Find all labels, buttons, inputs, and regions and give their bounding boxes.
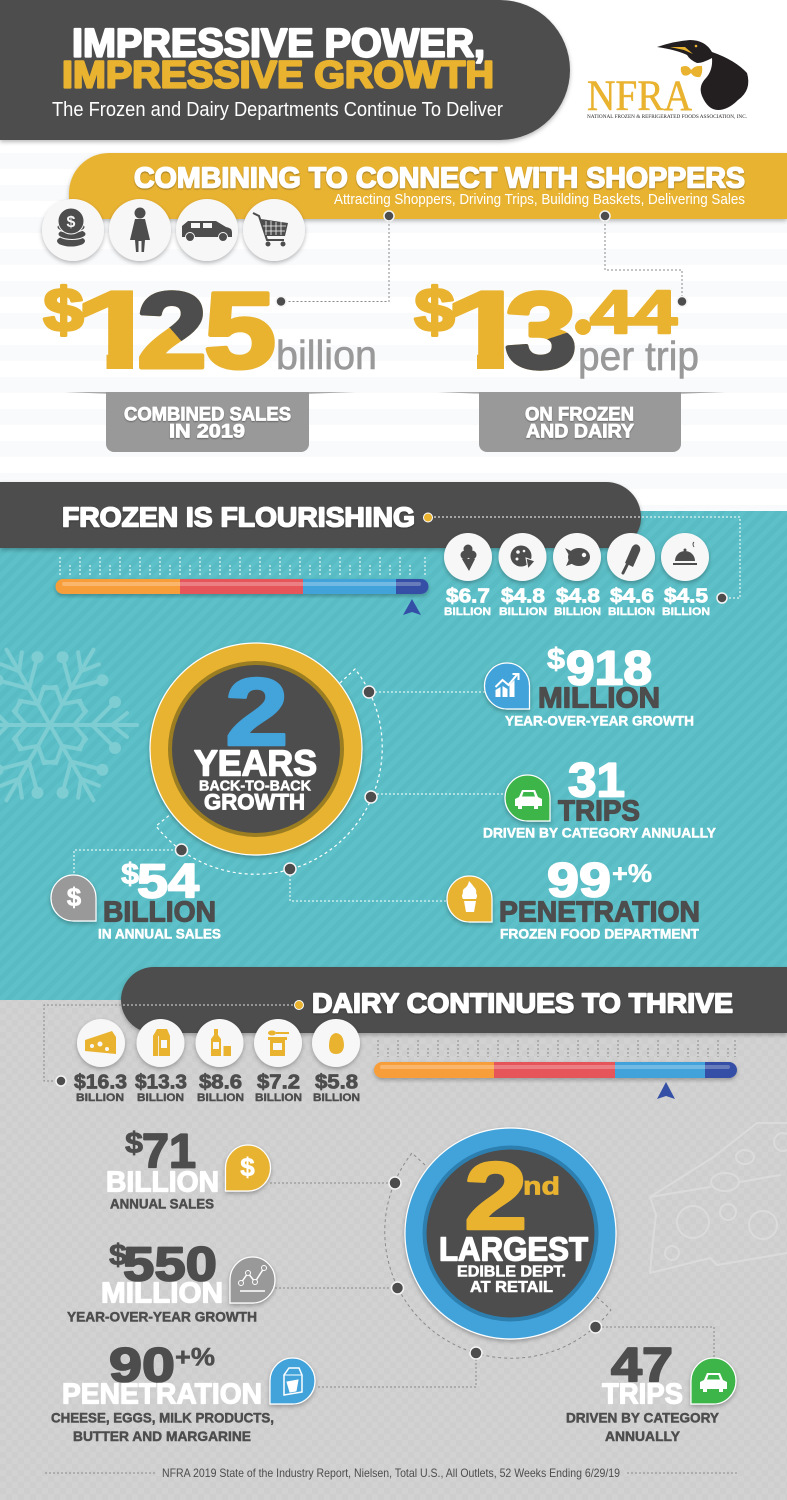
amount 3: $8.6 [199,1072,242,1094]
icon: yogurt [254,1019,302,1067]
stat: 550 million [67,1238,275,1325]
big numeral 2: 2 [225,659,288,766]
amount 5: $4.5 [664,586,708,608]
caption: YEAR-OVER-YEAR GROWTH [505,713,694,729]
LARGEST: LARGEST [439,1230,588,1268]
icon: milk bottle and glass [196,1019,244,1067]
unit 5: BILLION [313,1092,360,1104]
label box: on frozen and dairy: AND DAIRY [526,422,634,442]
number 3: 3 [505,270,577,390]
stat: 71 billion [106,1126,270,1212]
panel: frozen section [0,482,740,942]
amount 3: $4.8 [556,586,600,608]
connector: heading to amounts [424,513,740,603]
amount 4: $7.2 [257,1072,300,1094]
stat: 13.44 per trip [414,284,698,379]
icon: growth chart pin [484,663,530,709]
icon: coins: $ [67,214,76,231]
caption line 2: BUTTER AND MARGARINE [73,1428,251,1444]
BILLION: BILLION [103,896,216,928]
section heading: FROZEN IS FLOURISHING [62,502,415,532]
logo wordmark: NFRA [587,73,692,120]
unit 2: BILLION [499,606,547,618]
number 1: 1 [444,268,531,392]
caption line 1: DRIVEN BY CATEGORY [566,1410,720,1426]
number 2: 2 [137,270,207,390]
stat: 47 trips [566,1340,736,1444]
stat: 31 trips [483,754,717,841]
amount 4: $4.6 [610,586,654,608]
number 5: 5 [204,270,276,390]
icon: dollar pin: $ [67,882,82,912]
icon: fish [553,533,601,581]
label box: combined sales [65,392,355,452]
dollar sign: $ [109,1239,127,1272]
stat: 918 million [484,642,694,729]
number: 918 [566,642,652,696]
icon: pizza [498,533,546,581]
dollar sign: $ [44,276,84,344]
hero circle: 2 years growth [150,643,362,855]
progress bar [374,1062,737,1078]
AT RETAIL: AT RETAIL [470,1279,553,1296]
icon: cheese [77,1019,125,1067]
amount 2: $13.3 [135,1072,187,1094]
number 1: 1 [74,268,161,392]
icon: dollar pin [51,875,96,921]
header panel [0,0,570,140]
tick marks [378,1040,735,1057]
decimal point [575,319,591,335]
decimals: 44 [590,278,677,346]
unit 4: BILLION [255,1092,302,1104]
unit 4: BILLION [608,606,655,618]
EDIBLE DEPT.: EDIBLE DEPT. [457,1264,566,1280]
header banner shape [0,0,570,140]
icon: dollar pin: $ [240,1152,255,1182]
number: 31 [568,754,625,808]
unit 3: BILLION [554,606,601,618]
TRIPS: TRIPS [558,796,640,828]
icon: ice cream [444,533,492,581]
label box: on frozen and dairy: ON FROZEN [525,404,634,426]
dollar sign: $ [414,276,455,344]
number 2 dark overlay: 2 [137,270,207,390]
hero circle: 2nd largest [405,1128,616,1339]
TRIPS: TRIPS [602,1378,683,1410]
section heading: COMBINING TO CONNECT WITH SHOPPERS [134,162,745,194]
dollar sign: $ [125,1127,143,1160]
dollar sign: $ [547,643,565,676]
unit 3: BILLION [197,1092,244,1104]
panel: combining to connect with shoppers [42,153,787,452]
caption: FROZEN FOOD DEPARTMENT [500,926,699,942]
amount 5: $5.8 [315,1072,358,1094]
caption line 1: CHEESE, EGGS, MILK PRODUCTS, [51,1410,274,1426]
icon: car pin [691,1358,736,1404]
number 3 dark overlay: 3 [505,270,577,390]
logo tagline: NATIONAL FROZEN & REFRIGERATED FOODS ASSOCIATION, INC. [587,114,748,120]
icon: penguin eye [695,45,697,47]
gray dairy section background [0,1000,787,1500]
frozen banner [0,482,641,548]
connector: sales [276,211,394,306]
amount 2: $4.8 [501,586,545,608]
caption line 2: ANNUALLY [605,1428,681,1444]
NFRA logo [587,40,748,120]
BILLION: BILLION [106,1166,219,1198]
unit: billion: billion [276,332,377,378]
unit 5: BILLION [662,606,710,618]
icon: car pin [505,775,550,821]
icon: soft serve pin [447,876,492,922]
number: 71 [142,1126,196,1178]
panel: dairy section [44,967,787,1444]
PENETRATION: PENETRATION [62,1378,262,1410]
icon: coins [42,199,104,261]
amount 1: $6.7 [446,586,490,608]
unit: per trip: per trip [578,333,699,379]
YEARS: YEARS [194,742,317,784]
section subheading: Attracting Shoppers, Driving Trips, Building Baskets, Delivering Sales [334,192,745,208]
unit 1: BILLION [76,1092,124,1104]
stat: 125 billion [42,284,375,370]
marker arrow [403,599,421,615]
icon: car [176,199,238,261]
connector: per trip [600,211,687,306]
BACK-TO-BACK: BACK-TO-BACK [199,778,311,794]
footer source note: NFRA 2019 State of the Industry Report, Nielsen, Total U.S., All Outlets, 52 Weeks Ending 6/29/19 [162,1466,620,1480]
connector: heading to amounts [44,1000,304,1086]
caption: YEAR-OVER-YEAR GROWTH [67,1309,257,1325]
progress bar [56,579,429,594]
title line 2: IMPRESSIVE GROWTH [62,54,494,96]
caption: DRIVEN BY CATEGORY ANNUALLY [483,825,717,841]
stat: 90+% penetration [51,1340,315,1444]
icon: penguin [657,40,748,110]
GROWTH: GROWTH [204,790,305,814]
stat: 54 billion [51,856,221,942]
icon: milk carton pin [270,1358,315,1404]
connector arc: frozen [74,669,505,901]
label box: combined sales: IN 2019 [169,422,245,442]
icon: line chart pin [230,1257,275,1303]
cheese watermark [650,1123,787,1273]
snowflake watermark [0,636,137,814]
teal frozen section background [0,511,787,1000]
section heading: DAIRY CONTINUES TO THRIVE [312,988,733,1018]
number: 54 [137,856,199,908]
MILLION: MILLION [101,1278,223,1310]
stat: 99+% penetration [447,854,700,942]
yellow banner [69,153,787,219]
PENETRATION: PENETRATION [499,896,700,928]
caption: ANNUAL SALES [110,1196,214,1212]
icon: penguin beak stripe [670,47,693,54]
amount 1: $16.3 [74,1072,127,1094]
marker arrow [657,1082,675,1099]
MILLION: MILLION [538,682,660,714]
plus percent: +% [175,1344,215,1372]
unit 1: BILLION [444,606,491,618]
icon: milk carton [136,1019,184,1067]
caption: IN ANNUAL SALES [98,926,221,942]
icon: shopping cart [243,199,305,261]
unit 2: BILLION [137,1092,184,1104]
icon: popsicle [607,533,655,581]
connector arc: dairy [270,1153,714,1387]
plus percent: +% [612,860,652,888]
icon: dollar pin [226,1145,270,1191]
number: 90 [109,1340,175,1392]
icon: serving cloche [661,533,709,581]
icon: egg [312,1019,360,1067]
icon: woman shopper [109,199,171,261]
label box: combined sales: COMBINED SALES [124,404,291,426]
dollar sign: $ [121,858,139,891]
tick marks [60,557,425,575]
number: 47 [611,1340,673,1392]
amounts: dairy categories [74,1072,360,1104]
dairy banner [121,967,787,1033]
big numeral 2: 2 [464,1143,528,1250]
amounts: frozen categories [444,586,710,618]
label box: on frozen and dairy [438,392,725,452]
icon: bow tie [681,66,702,77]
nd suffix: nd [523,1172,560,1200]
subtitle: The Frozen and Dairy Departments Continue To Deliver [52,99,503,121]
number: 550 [123,1238,217,1292]
striped background: shopper section [0,153,787,513]
number: 99 [547,854,611,908]
title line 1: IMPRESSIVE POWER, [72,22,485,66]
